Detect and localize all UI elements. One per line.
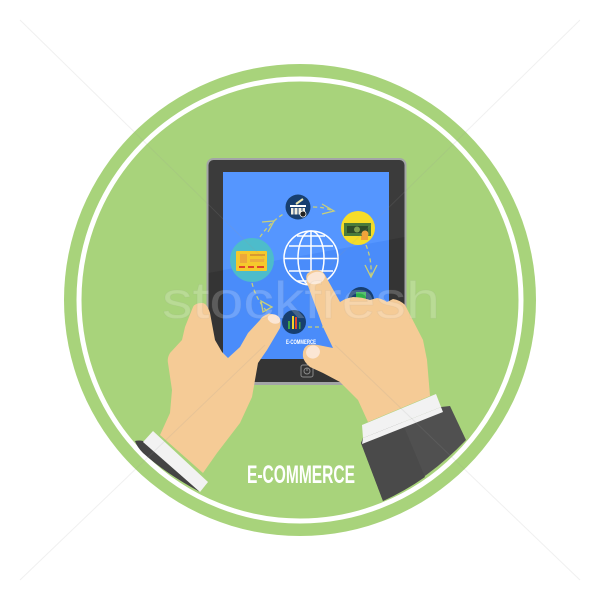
left sleeve xyxy=(135,440,200,492)
icon: money xyxy=(341,211,375,245)
icon: security shield xyxy=(348,287,374,313)
icon: credit card xyxy=(230,238,274,282)
left cuff xyxy=(143,431,208,492)
left hand with cuff and sleeve xyxy=(135,303,282,492)
title: E-COMMERCE xyxy=(247,461,355,489)
right hand with cuff and sleeve xyxy=(303,270,466,501)
home button xyxy=(301,365,313,377)
tablet xyxy=(206,158,406,385)
globe icon xyxy=(284,231,338,285)
icon: bar chart xyxy=(282,310,306,334)
right sleeve xyxy=(361,406,466,501)
badge: green circle with white ring xyxy=(64,64,536,536)
screen label: E-COMMERCE xyxy=(286,340,316,346)
right fingernails xyxy=(304,270,326,361)
tablet screen xyxy=(223,172,389,359)
left hand xyxy=(160,303,281,473)
left thumbnail xyxy=(266,313,282,325)
right hand xyxy=(303,270,430,422)
dashed arrows connecting icons xyxy=(252,204,377,327)
right cuff xyxy=(362,394,441,438)
icon: shopping basket xyxy=(286,194,310,220)
watermark: stockfresh xyxy=(162,272,440,330)
